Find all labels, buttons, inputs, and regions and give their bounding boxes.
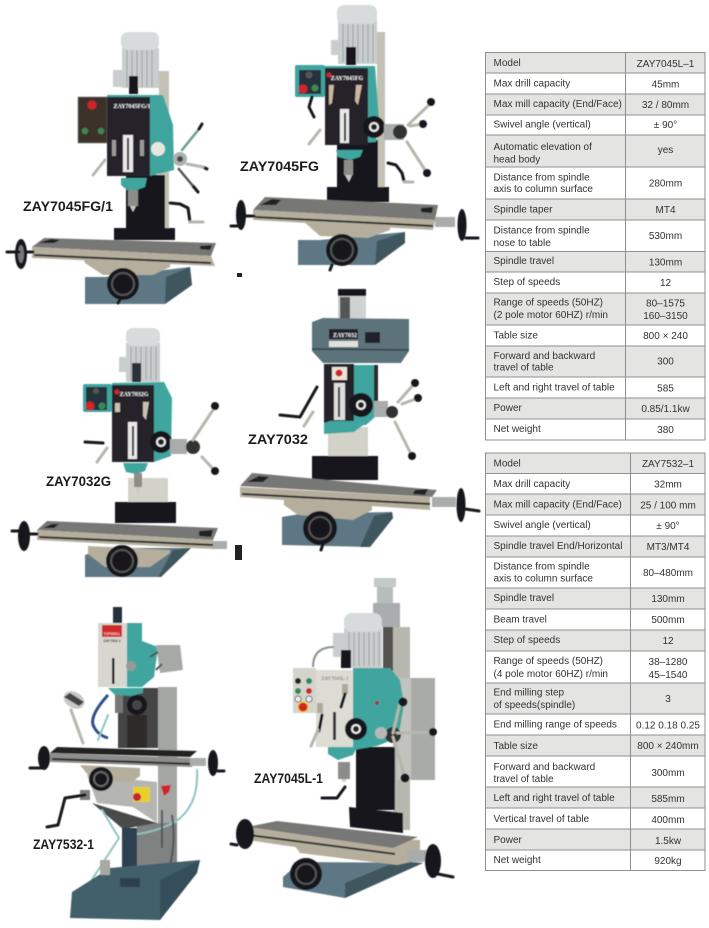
table: ZAY7045L-1 specifications: [485, 52, 705, 440]
row: Max drill capacity: Max drill capacity: [494, 479, 570, 490]
row: Spindle travel: 130mm: [649, 258, 682, 268]
row: Range of speeds: [494, 656, 688, 681]
machine: ZAY7045FG: [231, 5, 478, 270]
row: Left and right travel: [494, 382, 674, 394]
machine: ZAY7032G: ZAY7032G: [120, 392, 149, 398]
row: Step of speeds: 12: [662, 636, 674, 647]
row: Vertical travel: [494, 814, 685, 826]
row: Range of speeds: 160–3150: [643, 311, 688, 322]
machine: ZAY7045FG/1: ZAY7045FG/1: [113, 104, 151, 110]
row: Forward and backward travel: travel of table: [494, 774, 554, 785]
row: Range of speeds: 45–1540: [649, 670, 688, 681]
row: Model: Model: [494, 458, 521, 470]
row: Left and right travel: Left and right travel of table: [494, 793, 615, 804]
row: End milling range: 0.12 0.18 0.25: [636, 720, 700, 732]
row: Max drill capacity: [494, 78, 679, 90]
row: Spindle travel End/Horizontal: Spindle travel End/Horizontal: [494, 541, 622, 552]
row: Spindle taper: MT4: [656, 205, 676, 216]
row: Forward and backward travel: Forward and backward: [494, 351, 595, 362]
row: Range of speeds: 38–1280: [649, 657, 688, 668]
row: Beam travel: [494, 614, 685, 626]
row: Table size: [494, 330, 688, 342]
row: Forward and backward travel: [494, 762, 685, 785]
machine: ZAY7532-1: TOPWELL: [104, 632, 120, 636]
row: Step of speeds: [494, 277, 671, 289]
row: End milling range: End milling range of speeds: [494, 720, 617, 730]
row: Model: ZAY7045L–1: [637, 59, 695, 70]
machine: ZAY7045L-1: ZAY7045L-1: [321, 677, 349, 682]
row: Range of speeds: (4 pole motor 60HZ) r/min: [494, 669, 608, 680]
row: Automatic elevation: head body: [494, 154, 540, 166]
row: Model: Model: [494, 58, 521, 69]
row: Range of speeds: 80–1575: [646, 298, 685, 310]
row: Net weight: 380: [657, 425, 674, 436]
row: Range of speeds: [485, 293, 705, 325]
row: Net weight: [494, 424, 674, 436]
row: Spindle travel End/Horizontal: [485, 536, 705, 557]
row: Spindle taper: Spindle taper: [494, 204, 553, 216]
row: Forward and backward travel: Forward and backward: [494, 762, 595, 773]
row: Table size: 800 × 240: [643, 331, 688, 342]
row: End milling step: 3: [665, 694, 671, 705]
row: Table size: Table size: [494, 741, 538, 752]
table: ZAY7532-1 specifications: [485, 453, 705, 870]
row: Max mill capacity: 32 / 80mm: [642, 100, 689, 111]
row: Max drill capacity: 45mm: [652, 80, 679, 90]
row: Range of speeds: (2 pole motor 60HZ) r/min: [494, 310, 608, 321]
label: ZAY7045FG: ZAY7045FG: [240, 159, 319, 174]
row: End milling step: End milling step: [494, 688, 565, 698]
row: Forward and backward travel: [485, 346, 705, 377]
row: Max drill capacity: Max drill capacity: [494, 78, 570, 90]
row: Beam travel: Beam travel: [494, 614, 547, 626]
machine: ZAY7045L-1: [231, 578, 453, 898]
machine: ZAY7045FG/1: [7, 32, 216, 304]
row: Step of speeds: 12: [660, 278, 671, 289]
row: Power: [485, 829, 705, 850]
machine: ZAY7532-1: [30, 607, 224, 920]
row: Automatic elevation: Automatic elevation of: [494, 142, 592, 153]
row: Max mill capacity: Max mill capacity (End/Face): [494, 99, 622, 110]
row: Distance to table: [494, 226, 682, 249]
row: Left and right travel: 585mm: [651, 794, 685, 805]
row: Power: [485, 398, 705, 419]
row: Swivel angle: ± 90°: [654, 120, 677, 131]
row: End milling step: of speeds(spindle): [494, 700, 575, 711]
row: Distance to table: nose to table: [494, 238, 551, 249]
row: Spindle travel: Spindle travel: [494, 593, 554, 604]
machine: ZAY7032: ZAY7032: [333, 333, 357, 339]
row: Swivel angle: [494, 120, 677, 131]
machine: ZAY7045FG: ZAY7045FG: [331, 76, 364, 82]
row: Net weight: Net weight: [494, 855, 541, 866]
row: Distance to column: axis to column surface: [494, 184, 593, 195]
label: ZAY7032G: ZAY7032G: [46, 474, 111, 489]
row: Distance to column: Distance from spindle: [494, 172, 590, 184]
row: Max mill capacity: [485, 94, 705, 115]
row: End milling step: [485, 683, 705, 714]
row: Max mill capacity: Max mill capacity (End/Face): [494, 500, 622, 510]
row: Max drill capacity: [494, 479, 682, 490]
row: Spindle travel End/Horizontal: MT3/MT4: [647, 542, 690, 553]
row: Swivel angle: [494, 520, 680, 532]
label: ZAY7045FG/1: ZAY7045FG/1: [23, 199, 114, 214]
row: Distance to table: Distance from spindle: [494, 226, 590, 236]
row: Distance to column: 280mm: [649, 178, 682, 190]
row: Automatic elevation: [485, 135, 705, 167]
row: Model: [485, 453, 705, 474]
row: Vertical travel: 400mm: [651, 815, 685, 826]
row: Swivel angle: Swivel angle (vertical): [494, 520, 591, 531]
row: Spindle travel: [485, 251, 705, 272]
row: Swivel angle: Swivel angle (vertical): [494, 120, 591, 130]
row: Left and right travel: Left and right travel of table: [494, 382, 615, 394]
row: Net weight: [494, 855, 682, 867]
label: ZAY7045L-1: ZAY7045L-1: [254, 771, 323, 786]
row: Forward and backward travel: 300: [657, 356, 674, 368]
row: Distance to column: 80–480mm: [643, 568, 693, 579]
row: Left and right travel: 585: [657, 384, 674, 394]
row: Spindle travel: [485, 588, 705, 609]
row: Table size: 800 × 240mm: [637, 741, 699, 752]
row: Max drill capacity: 32mm: [654, 480, 682, 490]
row: Swivel angle: ± 90°: [656, 521, 680, 532]
row: Distance to column: [494, 172, 682, 195]
machine: ZAY7532-1: ZAY7532-1: [103, 639, 121, 643]
mark: small black square: [237, 273, 242, 277]
row: Model: ZAY7532–1: [642, 459, 694, 470]
machine: ZAY7032: [240, 289, 479, 550]
row: Forward and backward travel: 300mm: [651, 768, 685, 779]
row: End milling range: [494, 720, 700, 732]
row: Table size: [485, 735, 705, 756]
row: Distance to column: [494, 562, 693, 584]
label: ZAY7032: ZAY7032: [248, 432, 308, 447]
row: Model: [485, 53, 705, 73]
row: Table size: Table size: [494, 330, 538, 342]
row: Net weight: 920kg: [654, 856, 682, 867]
row: Step of speeds: Step of speeds: [494, 277, 560, 288]
row: Range of speeds: Range of speeds (50HZ): [494, 656, 603, 667]
label: ZAY7532-1: ZAY7532-1: [33, 837, 94, 852]
row: Spindle travel: Spindle travel: [494, 256, 554, 267]
row: Net weight: Net weight: [494, 424, 541, 435]
row: Spindle taper: [485, 199, 705, 220]
row: Step of speeds: [485, 630, 705, 651]
row: Distance to column: axis to column surface: [494, 574, 593, 584]
row: Forward and backward travel: travel of table: [494, 362, 554, 374]
row: Spindle travel: 130mm: [651, 594, 685, 605]
row: Automatic elevation: yes: [658, 145, 673, 156]
row: Distance to column: Distance from spindle: [494, 562, 590, 572]
row: Step of speeds: Step of speeds: [494, 635, 560, 646]
row: Range of speeds: Range of speeds (50HZ): [494, 298, 603, 308]
row: Distance to table: 530mm: [649, 231, 682, 242]
row: Power: Power: [494, 835, 523, 846]
row: Power: Power: [494, 403, 523, 414]
machine: ZAY7032G: [12, 328, 227, 577]
row: Left and right travel: [485, 787, 705, 808]
row: Max mill capacity: [485, 494, 705, 515]
row: Power: 1.5kw: [655, 836, 682, 847]
row: Power: 0.85/1.1kw: [641, 404, 690, 415]
mark: clipped black handle: [235, 545, 242, 560]
row: Vertical travel: Vertical travel of table: [494, 814, 590, 825]
row: Max mill capacity: 25 / 100 mm: [640, 500, 696, 512]
row: Beam travel: 500mm: [651, 615, 685, 626]
